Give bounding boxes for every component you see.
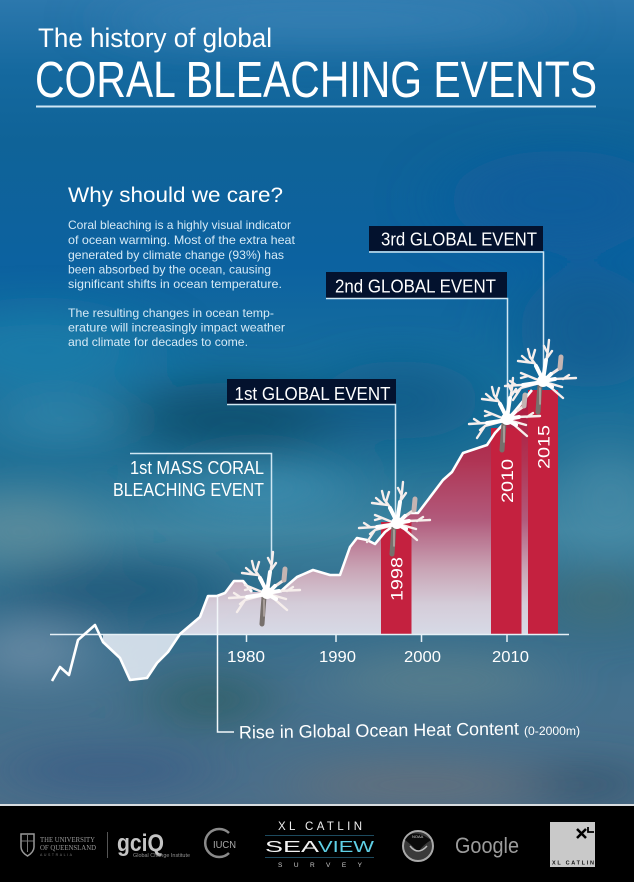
footer: partner logos <box>0 804 634 882</box>
axis line and ticks <box>50 634 569 642</box>
body text: generated by climate change (93%) has <box>68 248 284 262</box>
callout: 3rd global event <box>369 226 544 375</box>
area above axis <box>180 390 558 634</box>
body text: The resulting changes in ocean temp- <box>68 306 274 320</box>
icon: coral 1998 <box>359 482 430 554</box>
logo: XL Catlin Seaview Survey <box>265 821 375 869</box>
logo: University of Queensland: THE UNIVERSITY <box>40 835 96 844</box>
callout: rise in global ocean heat content <box>218 596 580 742</box>
callout: rise in global ocean heat content: (0-2000m) <box>524 726 580 738</box>
red bar: 1998: 1998 <box>388 557 406 601</box>
callout: 1st mass coral bleaching event: BLEACHING EVENT <box>113 479 264 500</box>
logo: University of Queensland: OF QUEENSLAND <box>40 843 97 852</box>
area below axis <box>103 634 180 680</box>
logo: Google: Google <box>455 833 519 858</box>
icon: coral 1980s <box>229 552 300 624</box>
callout: 2nd global event <box>326 272 508 410</box>
body text: erature will increasingly impact weather <box>68 320 285 334</box>
chart: ocean heat content <box>50 390 569 681</box>
logo: XL Catlin: XL CATLIN <box>552 860 594 866</box>
callout: 3rd global event: 3rd GLOBAL EVENT <box>381 228 537 250</box>
logo: University of Queensland: AUSTRALIA <box>40 853 73 857</box>
panel: why should we care <box>68 183 296 349</box>
logo: XL Catlin Seaview Survey: VIEW <box>318 839 375 856</box>
red bar: 2015 <box>528 390 558 634</box>
icon: coral 2010 <box>469 378 540 450</box>
logo: gciQ: Global Change Institute <box>133 853 190 859</box>
body text: and climate for decades to come. <box>68 335 248 349</box>
callout: 1st mass coral bleaching event: 1st MASS CORAL <box>130 457 264 478</box>
axis labels: 1990 <box>319 649 356 666</box>
axis labels: 1980 <box>227 649 265 666</box>
logo: NOAA: NOAA <box>412 834 424 839</box>
logo: gciQ <box>117 830 190 859</box>
callout: 1st global event: 1st GLOBAL EVENT <box>234 383 390 404</box>
icon: coral 2015 <box>505 340 576 412</box>
title: subtitle line: The history of global <box>38 23 272 53</box>
logo: University of Queensland <box>21 834 97 857</box>
body text: of ocean warming. Most of the extra heat <box>68 233 296 247</box>
red bar: 2015: 2015 <box>534 425 554 469</box>
logo: NOAA <box>403 831 433 861</box>
logo: XL Catlin Seaview Survey: XL CATLIN <box>278 821 362 833</box>
axis labels <box>227 649 529 666</box>
logo: XL Catlin Seaview Survey: SEA <box>265 839 320 856</box>
red bar: 2010 <box>491 428 522 634</box>
logo: XL Catlin <box>550 822 595 867</box>
body text: been absorbed by the ocean, causing <box>68 262 271 276</box>
heat content curve <box>52 390 532 681</box>
callout: 1st global event <box>227 379 396 520</box>
axis labels: 2010 <box>492 649 529 666</box>
red bar: 2010: 2010 <box>498 459 517 503</box>
callout: 2nd global event: 2nd GLOBAL EVENT <box>335 276 496 296</box>
title <box>35 23 597 108</box>
logo: gciQ: gciQ <box>117 830 164 857</box>
heading: why should we care: Why should we care? <box>68 183 283 207</box>
body text <box>68 218 296 349</box>
callout: rise in global ocean heat content: Rise in Global Ocean Heat Content <box>239 719 519 742</box>
red bar: 1998 <box>381 522 412 634</box>
logo: IUCN <box>205 829 236 857</box>
body text: Coral bleaching is a highly visual indicator <box>68 218 291 232</box>
callout: 1st mass coral bleaching event <box>113 454 272 570</box>
logo: IUCN: IUCN <box>213 840 236 851</box>
logo: XL Catlin Seaview Survey: SURVEY <box>278 862 363 869</box>
axis labels: 2000 <box>404 649 441 666</box>
body text: significant shifts in ocean temperature. <box>68 277 282 291</box>
